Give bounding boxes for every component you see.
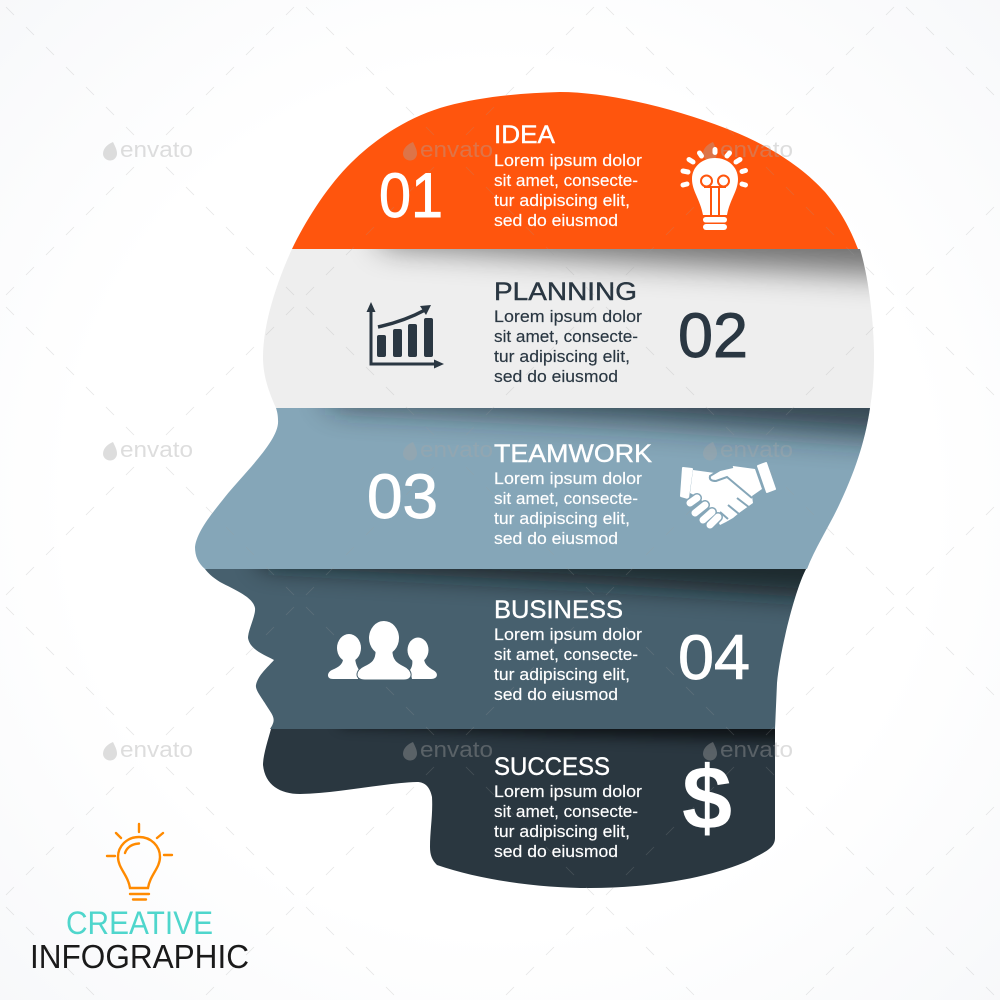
heading: business: BUSINESS (494, 596, 623, 624)
text block: success: tur adipiscing elit, (494, 823, 630, 841)
envato watermarks: envato (120, 137, 193, 162)
text: infographic: INFOGRAPHIC (30, 938, 249, 975)
text block: teamwork (494, 470, 643, 548)
icon: dollar sign: $ (682, 749, 732, 849)
envato watermarks: envato (420, 437, 493, 462)
text block: planning: Lorem ipsum dolor (494, 308, 643, 326)
row 1: idea (379, 121, 746, 231)
text block: success: Lorem ipsum dolor (494, 783, 643, 801)
text block: idea (494, 152, 643, 230)
number 04: 04 (678, 623, 750, 693)
envato watermarks: envato (420, 737, 493, 762)
icon: light bulb (683, 150, 746, 230)
icon: people (328, 621, 437, 680)
text block: business: tur adipiscing elit, (494, 666, 630, 684)
text block: idea: tur adipiscing elit, (494, 192, 630, 210)
text block: success: sit amet, consecte- (494, 803, 638, 821)
envato watermarks (103, 137, 793, 762)
heading: teamwork: TEAMWORK (494, 440, 652, 468)
text block: business: sed do eiusmod (494, 686, 618, 704)
icon: handshake (681, 463, 775, 525)
panel: band 1 idea (292, 92, 858, 249)
text: creative: CREATIVE (66, 905, 213, 941)
heading: planning: PLANNING (494, 278, 637, 306)
text block: business (494, 626, 643, 704)
panel: band 5 success (263, 729, 775, 888)
text block: idea: Lorem ipsum dolor (494, 152, 643, 170)
text block: planning: sed do eiusmod (494, 368, 618, 386)
row 3: teamwork (367, 440, 775, 548)
number 03: 03 (367, 462, 438, 532)
text block: teamwork: tur adipiscing elit, (494, 510, 630, 528)
number 01: 01 (379, 161, 443, 231)
icon: bar chart (366, 302, 444, 368)
envato watermarks: envato (720, 137, 793, 162)
panel: band 2 planning (263, 249, 874, 408)
text block: idea: sed do eiusmod (494, 212, 618, 230)
text block: success (494, 783, 643, 861)
heading: idea: IDEA (494, 121, 555, 149)
panel: band 3 teamwork (195, 408, 870, 569)
text block: planning: sit amet, consecte- (494, 328, 638, 346)
envato watermarks: envato (120, 737, 193, 762)
text block: business: sit amet, consecte- (494, 646, 638, 664)
icon: outline bulb (107, 824, 172, 900)
text block: idea: sit amet, consecte- (494, 172, 638, 190)
text block: teamwork: Lorem ipsum dolor (494, 470, 643, 488)
text block: success: sed do eiusmod (494, 843, 618, 861)
heading: success: SUCCESS (494, 753, 610, 781)
envato watermarks: envato (720, 737, 793, 762)
panel: band 4 business (205, 569, 806, 729)
envato watermarks: envato (420, 137, 493, 162)
row 2: planning (366, 278, 748, 386)
number 02: 02 (678, 301, 748, 371)
text block: planning: tur adipiscing elit, (494, 348, 630, 366)
text block: planning (494, 308, 643, 386)
envato watermarks: envato (120, 437, 193, 462)
row 5: success (494, 749, 732, 861)
head infographic (195, 92, 930, 888)
envato watermarks: envato (720, 437, 793, 462)
text block: teamwork: sit amet, consecte- (494, 490, 638, 508)
logo: creative infographic (30, 824, 249, 975)
text block: business: Lorem ipsum dolor (494, 626, 643, 644)
text block: teamwork: sed do eiusmod (494, 530, 618, 548)
row 4: business (328, 596, 750, 704)
